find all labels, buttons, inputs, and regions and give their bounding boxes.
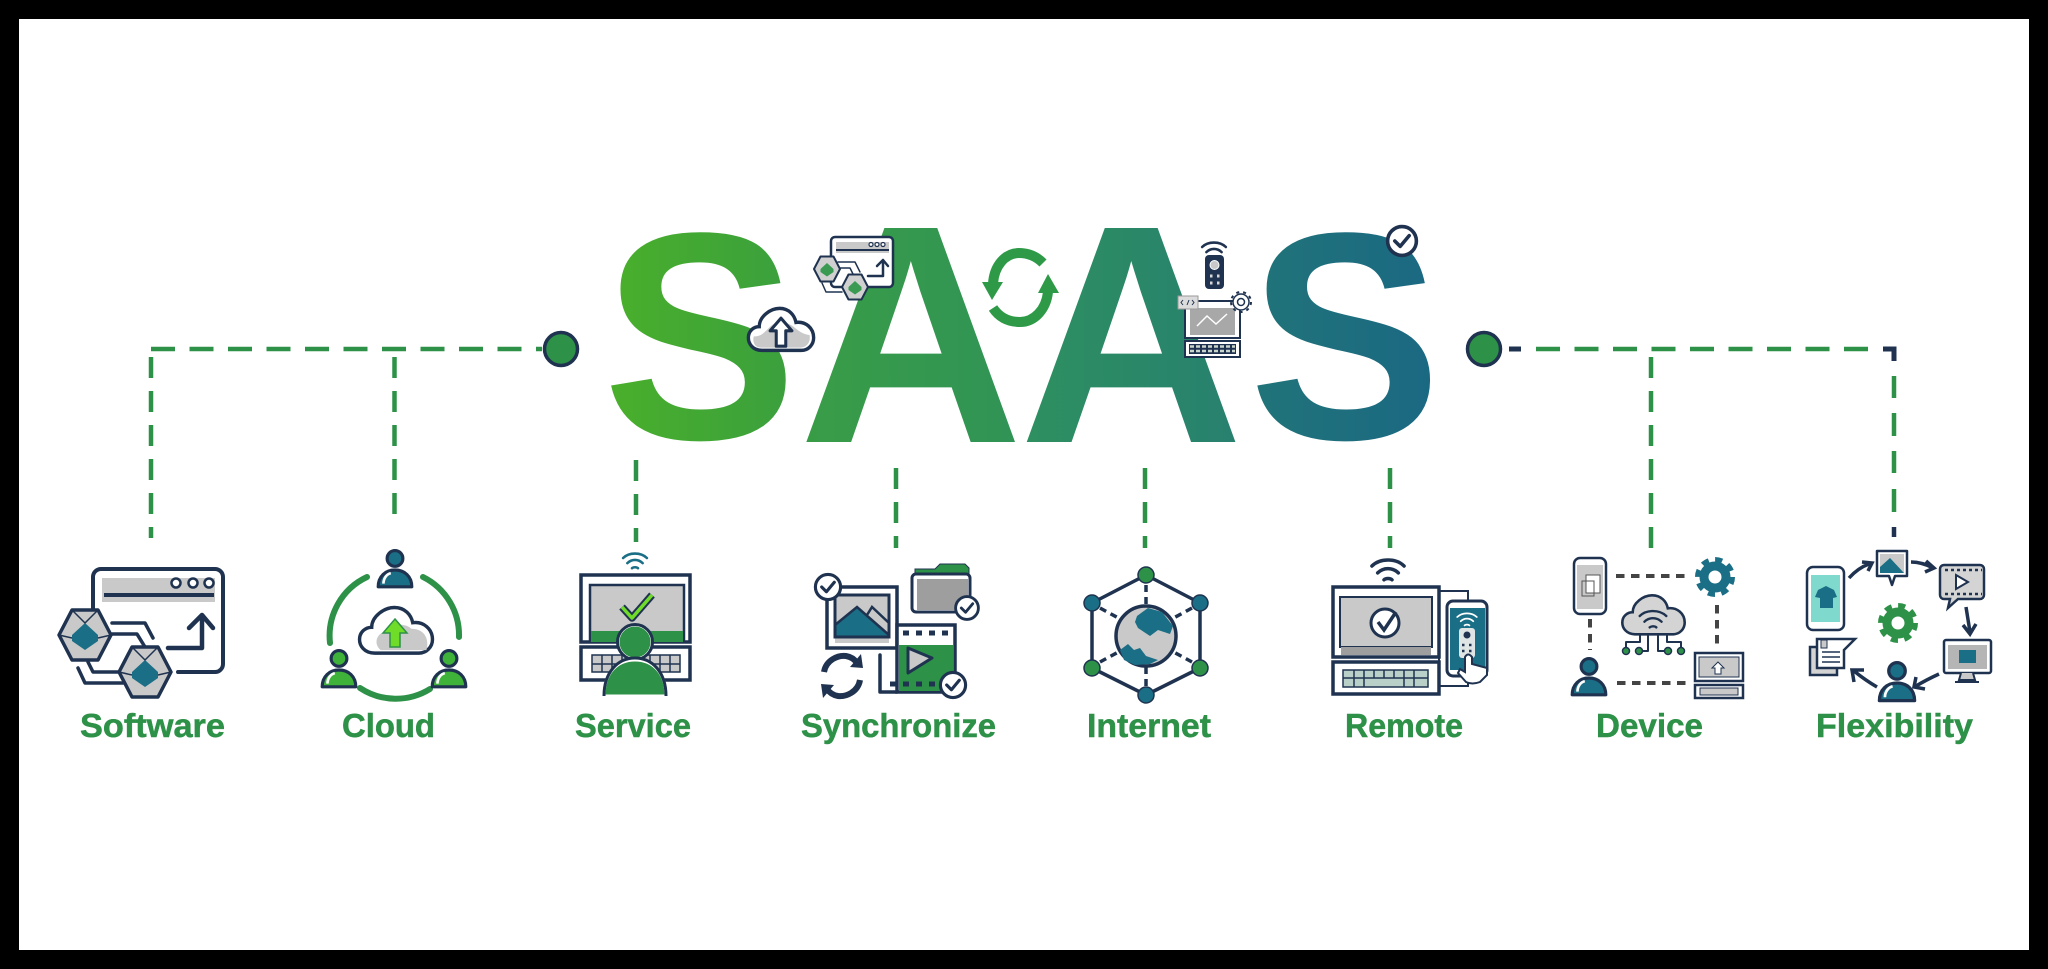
label: Synchronize: Synchronize [801, 707, 996, 744]
label: Remote: Remote [1345, 707, 1463, 744]
icon: title check badge [1388, 227, 1416, 255]
connector: remote [1388, 468, 1392, 548]
title: SAAS: S [1249, 171, 1441, 501]
connector: right branch [1468, 332, 1894, 548]
connector: left branch [151, 332, 578, 538]
label: Device: Device [1596, 707, 1703, 744]
connector: service [634, 460, 638, 542]
icon: title software window [814, 237, 893, 300]
icon: title computer [1178, 292, 1251, 357]
icon: internet [1084, 567, 1208, 703]
label: Software: Software [80, 707, 225, 744]
label: Internet: Internet [1087, 707, 1211, 744]
label: Flexibility: Flexibility [1816, 707, 1974, 744]
icon: flexibility [1807, 551, 1991, 701]
title: SAAS: S [603, 172, 797, 502]
label: Service: Service [575, 707, 691, 744]
title: SAAS: A [799, 160, 1023, 508]
icon: service [581, 554, 690, 696]
label: Cloud: Cloud [342, 707, 435, 744]
icon: title sync arrows [982, 253, 1059, 322]
icon: software [59, 569, 223, 697]
title: SAAS: A [1019, 160, 1244, 508]
icon: cloud [322, 551, 466, 699]
icon: remote [1333, 560, 1487, 694]
title: SAAS [603, 160, 1441, 508]
connector: synchronize [894, 468, 898, 548]
connector: internet [1143, 468, 1147, 548]
icon: title cloud [748, 308, 814, 350]
icon: title remote [1202, 243, 1226, 289]
icon: synchronize [815, 564, 978, 698]
icon: device [1572, 558, 1743, 698]
